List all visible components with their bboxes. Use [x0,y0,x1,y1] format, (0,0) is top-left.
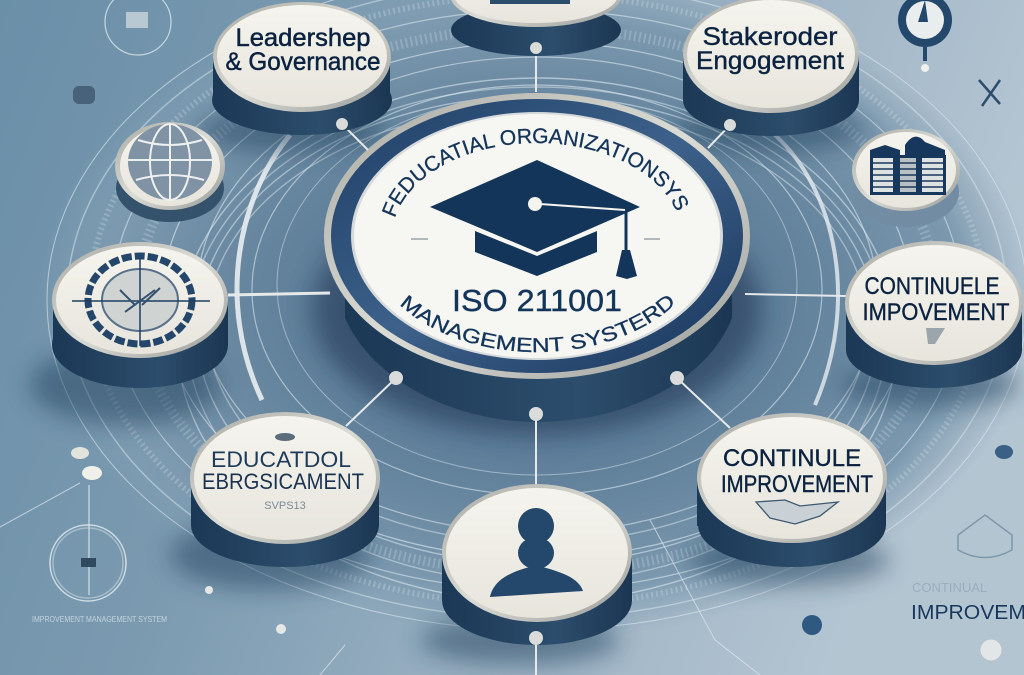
node label: CONTINUELE [864,273,1000,300]
node label: EDUCATDOL [211,447,351,472]
icon: faint top-left badge [105,0,171,55]
central emblem base [345,250,732,422]
node label: Leadershep [236,24,370,52]
diagonal lines and corner decorations [0,483,760,675]
blue ring [331,99,743,373]
improvement caption right: IMPROVEM [911,602,1024,624]
panel: person node [442,484,632,645]
silver outer ring [324,93,750,379]
panel: leadership and governance node: & Governance [226,48,380,76]
panel: stakeholder engagement node [683,0,859,136]
panel: educational environment node: EBRGSICAMENT [202,469,364,494]
panel: globe node [115,122,225,222]
icon: globe [128,124,212,200]
thick white arcs [237,135,290,400]
panel: top centre node [450,0,622,56]
emblem face [354,114,720,358]
small beads [71,445,1013,661]
panel: books node [852,129,960,227]
soft shadows under nodes [30,108,1020,665]
node label: Stakeroder [702,23,838,51]
panel: central emblem [301,93,773,446]
node label: CONTINULE [723,445,861,472]
panel: leadership and governance node [212,2,392,135]
panel: continual improvement node right [845,241,1023,388]
icon: bottom-left target circle [50,485,126,601]
emblem arc text bottom: MANAGEMENT SYSTERD [400,294,673,352]
panel: continual improvement node right: IMPOVEMENT [862,299,1010,326]
graduation cap [430,160,640,279]
faint caption bottom-left: IMPROVEMENT MANAGEMENT SYSTEM [32,615,167,624]
icon: small dark square [73,86,95,104]
icon: compass seal [72,256,210,346]
icon: person [490,508,583,597]
connector end dots [336,42,736,645]
emblem arc text top: FEDUCATIAL ORGANIZATIONSYS [382,128,688,217]
panel: continual improvement node bottom right [697,413,887,567]
icon: cross mark [979,80,1000,106]
faint caption right: CONTINUAL [912,580,987,595]
emblem title: ISO 211001 [452,283,622,318]
icon: open book [756,500,838,524]
panel: educational environment node: SVPS13 [264,500,306,512]
connectors from nodes to centre [228,48,846,675]
icon: layered pyramid bottom-right [958,515,1012,558]
panel: continual improvement node bottom right: IMPROVEMENT [721,471,873,498]
icon: books [870,137,946,195]
icon: small top-right clock pin [898,0,952,72]
panel: stakeholder engagement node: Engogement [696,47,844,75]
panel: educational environment node [190,412,380,567]
panel: compass seal node [52,242,228,388]
